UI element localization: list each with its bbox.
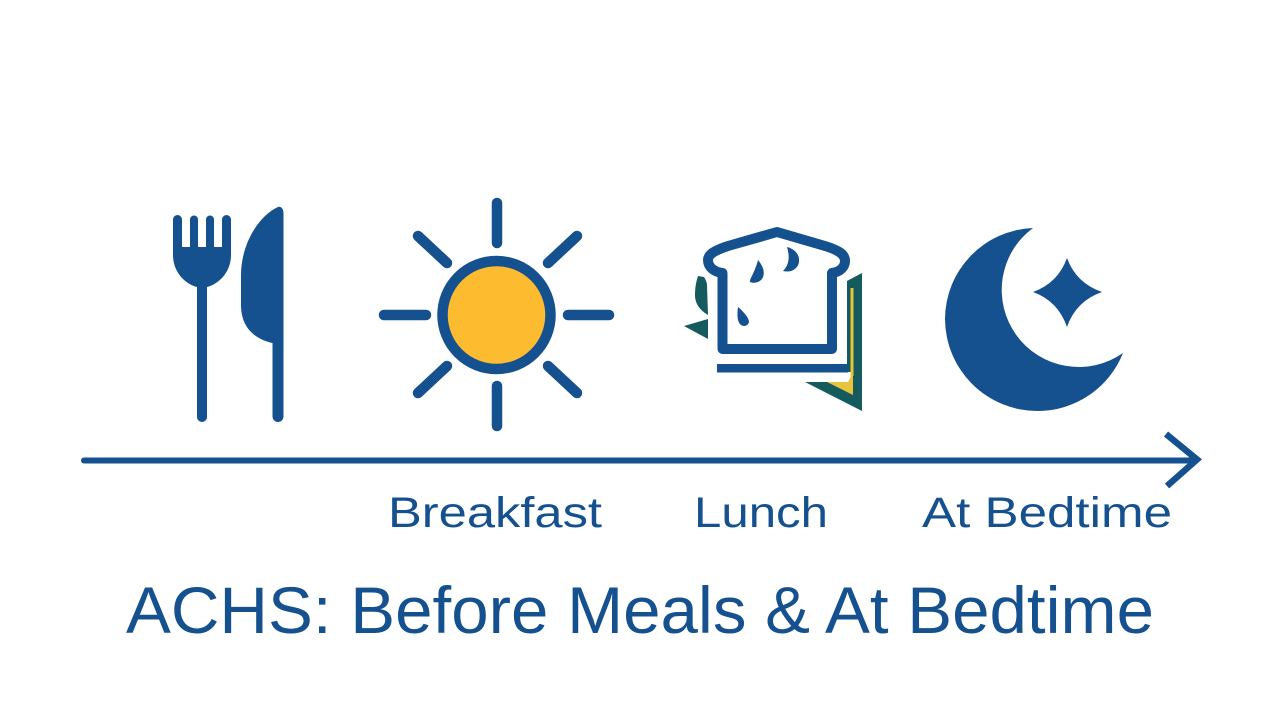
label: Lunch: Lunch: [694, 489, 828, 537]
icon: bread slice: [684, 232, 862, 411]
label: At Bedtime: At Bedtime: [922, 489, 1172, 537]
title: ACHS: Before Meals & At Bedtime: [126, 573, 1154, 647]
icon: sun: [384, 203, 609, 426]
label: Breakfast: Breakfast: [388, 489, 602, 537]
arrow: timeline: [84, 434, 1197, 486]
icon: crescent moon and star: [945, 228, 1123, 411]
icon: fork and knife: [173, 207, 284, 422]
